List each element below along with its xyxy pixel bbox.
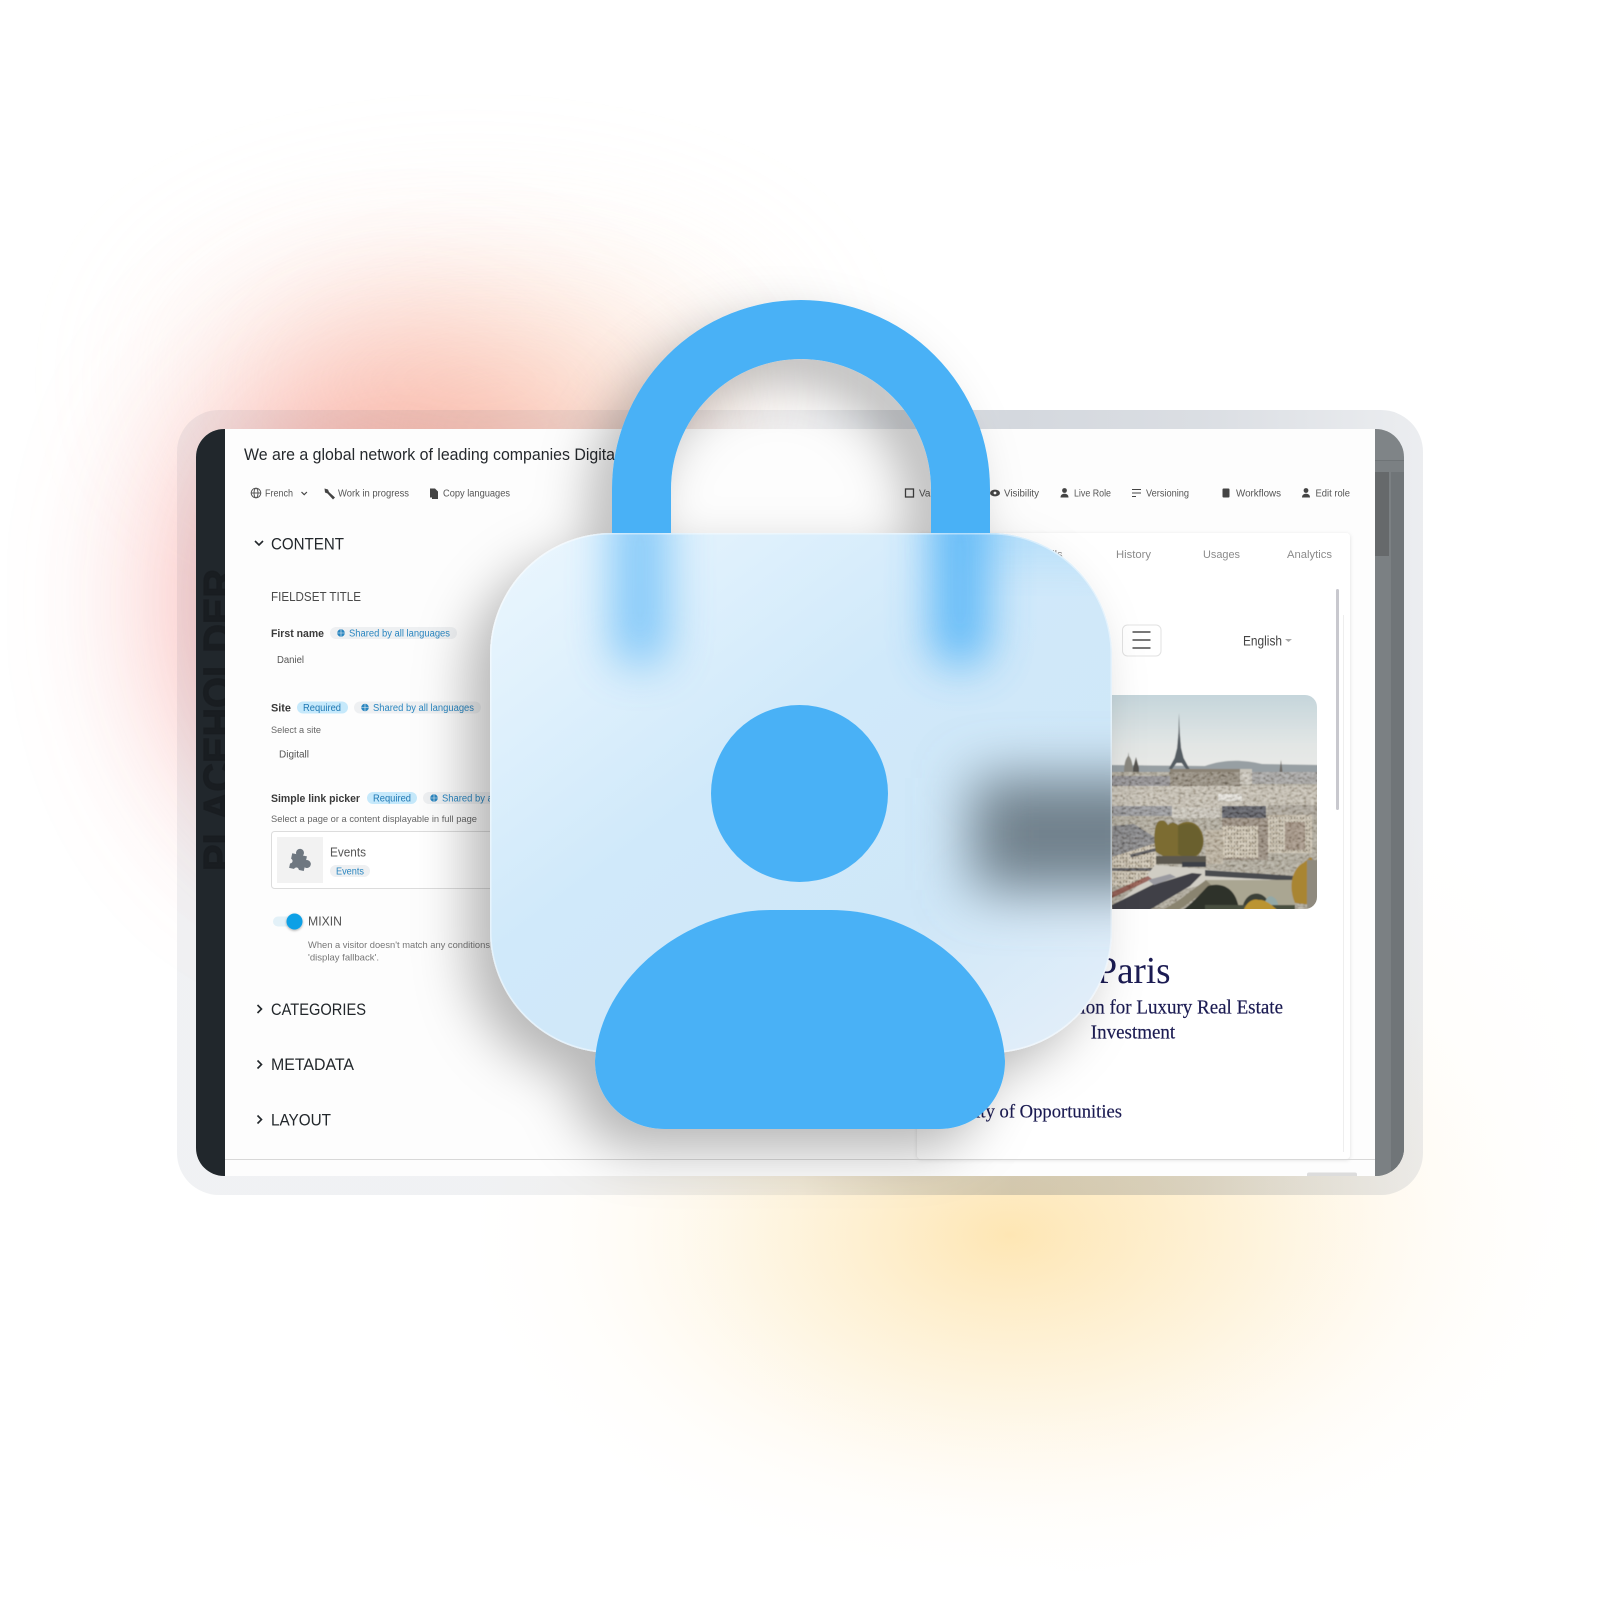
content card: events xyxy=(272,832,572,888)
tabs xyxy=(1029,549,1332,561)
mixin toggle xyxy=(273,914,490,964)
building facades xyxy=(1222,818,1268,860)
field: simple link picker xyxy=(271,792,550,825)
section heading: content xyxy=(254,538,344,550)
field: site: Select a site xyxy=(271,725,321,736)
section heading: metadata: METADATA xyxy=(271,1055,355,1074)
scrollbar xyxy=(1336,589,1339,810)
content card: events: Events xyxy=(336,866,364,878)
subheading: A Destination for Luxury Real Estate xyxy=(1000,997,1283,1019)
sidebar with placeholder label: PLACEHOLDER xyxy=(195,569,241,871)
mixin toggle: 'display fallback'. xyxy=(308,952,379,964)
section heading: categories: CATEGORIES xyxy=(271,1000,366,1019)
field: first name xyxy=(271,627,457,666)
toolbar: left actions: Work in progress xyxy=(338,488,409,500)
mansard roofs and mid blocks xyxy=(1112,806,1172,816)
subheading: Investment xyxy=(1091,1022,1176,1044)
icon: copy xyxy=(430,488,438,499)
preview panel xyxy=(917,533,1350,1159)
Eiffel tower xyxy=(1169,713,1190,769)
field: first name: Shared by all languages xyxy=(349,628,450,640)
field: simple link picker: Simple link picker xyxy=(271,793,361,805)
field: site: Digitall xyxy=(279,750,309,760)
toolbar: right actions: Edit role xyxy=(1316,488,1350,500)
autumn trees xyxy=(1292,858,1312,905)
field: site: Shared by all languages xyxy=(373,703,474,714)
toolbar: right actions: Live Role xyxy=(1074,488,1111,500)
sidebar with placeholder label xyxy=(196,429,225,1176)
square and road xyxy=(1111,865,1295,909)
blurred top band xyxy=(950,500,1125,560)
icon: user xyxy=(1302,488,1310,498)
toolbar: right actions: Workflows xyxy=(1236,488,1281,500)
field: first name: First name xyxy=(271,628,324,640)
icon: clipboard xyxy=(1222,488,1230,498)
lock icon xyxy=(490,330,1172,1129)
tabs: Details xyxy=(1029,549,1063,561)
person head xyxy=(711,705,888,882)
lock shackle xyxy=(642,330,960,560)
fieldset title: FIELDSET TITLE xyxy=(271,590,361,604)
tabs: Usages xyxy=(1203,549,1240,561)
frosted lock body xyxy=(490,490,1172,1053)
bridge xyxy=(1205,880,1295,905)
toolbar: left actions: Copy languages xyxy=(443,488,510,500)
field: simple link picker: Shared by all languages xyxy=(442,794,543,804)
field: first name: Daniel xyxy=(277,655,304,666)
city base xyxy=(1110,772,1320,912)
field: simple link picker: Select a page or a content displayable in full page xyxy=(271,814,477,825)
field: site: Site xyxy=(271,702,291,714)
section heading: layout: LAYOUT xyxy=(271,1110,331,1130)
toolbar: right actions: Versioning xyxy=(1146,488,1189,500)
blurred photo smudge xyxy=(972,778,1172,890)
dark road xyxy=(1112,873,1202,912)
mixin toggle: MIXIN xyxy=(308,914,342,928)
dimmed right strip xyxy=(1375,429,1404,1176)
icon: user xyxy=(1060,488,1068,498)
icon: globe xyxy=(251,488,261,498)
blurred shackle legs behind glass xyxy=(612,490,668,665)
form content xyxy=(254,538,490,1126)
hill and distant roofs xyxy=(1110,761,1320,790)
person shoulders xyxy=(595,910,1005,1129)
toolbar: right actions: Visibility xyxy=(1004,488,1039,500)
field: simple link picker: Required xyxy=(373,794,411,804)
content card: events: Events xyxy=(330,846,366,860)
icon: wrench xyxy=(324,488,335,500)
language selector: English xyxy=(1243,632,1282,648)
toolbar: right actions: Variants xyxy=(919,488,955,500)
tabs: Analytics xyxy=(1287,549,1332,561)
field: site: Required xyxy=(303,703,341,714)
mixin toggle: When a visitor doesn't match any conditions xyxy=(308,940,490,951)
photo: Paris skyline xyxy=(1110,693,1320,913)
texture xyxy=(1110,772,1320,912)
tablet frame xyxy=(177,410,1423,1195)
section title: A City of Opportunities xyxy=(946,1101,1122,1123)
trees xyxy=(1154,820,1204,859)
toolbar: left actions xyxy=(251,488,510,500)
page title: We are a global network of leading companies Digita xyxy=(244,445,616,464)
icon: versioning xyxy=(1132,490,1141,496)
bottom divider and tab xyxy=(225,1159,1375,1178)
section heading: content: CONTENT xyxy=(271,534,344,554)
field: site xyxy=(271,702,481,760)
tabs: History xyxy=(1116,549,1152,561)
subheading xyxy=(1000,997,1283,1044)
headline: Paris: Paris xyxy=(1096,950,1170,992)
icon: eye xyxy=(990,490,1000,496)
toolbar: right actions xyxy=(906,488,1350,500)
hamburger menu xyxy=(1122,625,1161,656)
toolbar: left actions: French xyxy=(265,488,293,500)
tablet screen xyxy=(195,429,1404,1178)
icon: puzzle piece xyxy=(286,847,314,875)
